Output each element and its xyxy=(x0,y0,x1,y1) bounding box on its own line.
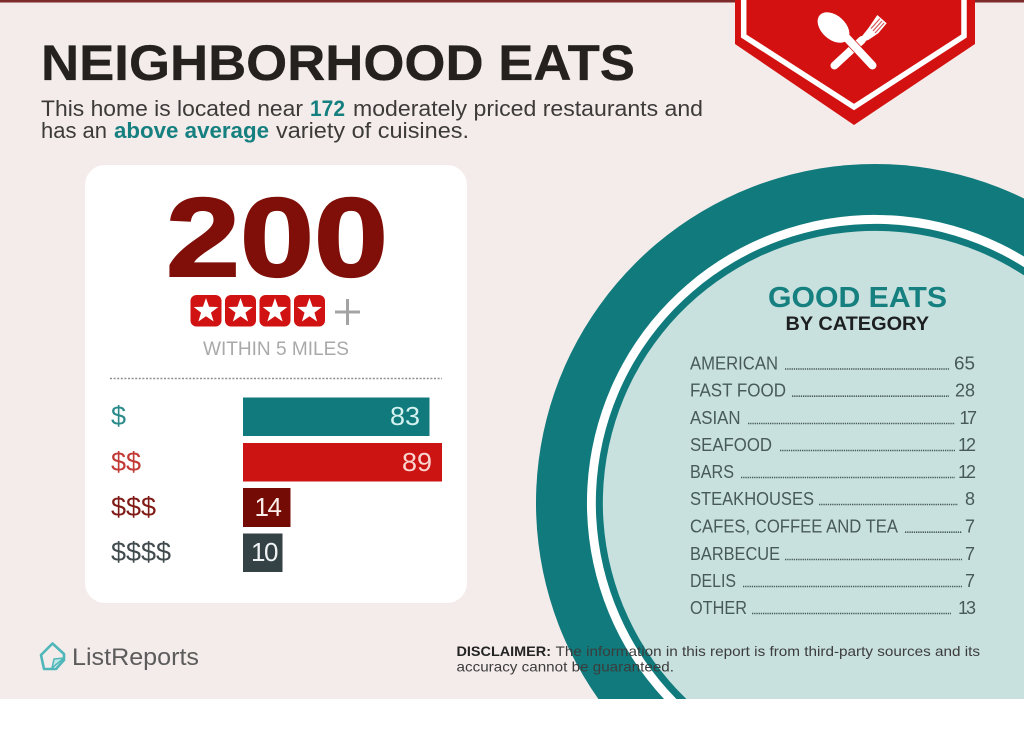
row: seafood: SEAFOOD xyxy=(690,435,772,455)
title: NEIGHBORHOOD EATS xyxy=(41,35,635,91)
subtitle text: 172 xyxy=(310,96,345,121)
subtitle text: moderately priced restaurants and xyxy=(353,96,703,121)
subtitle text: above average xyxy=(114,118,269,143)
row: seafood: 12 xyxy=(958,435,976,455)
bar: two dollars, 89 xyxy=(111,443,442,482)
row: delis: DELIS xyxy=(690,571,736,591)
icon: red shield badge xyxy=(735,0,975,125)
row: fast food xyxy=(690,381,975,401)
row: barbecue: 7 xyxy=(965,544,975,564)
row: barbecue xyxy=(690,544,975,564)
row: bars xyxy=(690,462,976,482)
icon: spoon and fork xyxy=(812,6,887,65)
logo: listreports: ListReports xyxy=(72,644,199,671)
row: american: 65 xyxy=(954,354,975,374)
row: bars: 12 xyxy=(958,462,976,482)
row: other: 13 xyxy=(958,598,976,618)
icon: house logo xyxy=(41,644,64,669)
disclaimer xyxy=(456,643,980,674)
bar: three dollars, 14: $$$ xyxy=(111,492,156,522)
bar: four dollars, 10: $$$$ xyxy=(111,537,171,567)
within 5 miles caption: WITHIN 5 MILES xyxy=(203,338,349,360)
icon: plus sign xyxy=(335,299,360,325)
row: asian: ASIAN xyxy=(690,408,740,428)
row: fast food: FAST FOOD xyxy=(690,381,786,401)
bar: two dollars, 89: $$ xyxy=(111,447,141,477)
bar: one dollar, 83: $ xyxy=(111,401,126,431)
category list xyxy=(690,354,977,618)
row: seafood xyxy=(690,435,976,455)
row: other xyxy=(690,598,976,618)
row: cafes, coffee and tea: CAFES, COFFEE AND TEA xyxy=(690,517,898,537)
subtitle text: variety of cuisines. xyxy=(276,118,469,143)
row: delis xyxy=(690,571,975,591)
big number 200: 200 xyxy=(166,175,388,300)
row: bars: BARS xyxy=(690,462,734,482)
bar: four dollars, 10 xyxy=(111,534,282,572)
bar: three dollars, 14 xyxy=(111,488,290,527)
disclaimer: accuracy cannot be guaranteed. xyxy=(456,658,674,674)
heading: good eats: GOOD EATS xyxy=(768,282,947,314)
row: other: OTHER xyxy=(690,598,747,618)
subtitle text: has an xyxy=(41,118,107,143)
row: steakhouses: STEAKHOUSES xyxy=(690,489,814,509)
row: american: AMERICAN xyxy=(690,354,778,374)
row: steakhouses xyxy=(690,489,975,509)
row: asian: 17 xyxy=(960,408,977,428)
row: american xyxy=(690,354,975,374)
heading: by category: BY CATEGORY xyxy=(786,313,929,335)
disclaimer: DISCLAIMER: xyxy=(456,643,551,659)
bar: one dollar, 83 xyxy=(111,398,430,436)
disclaimer: The information in this report is from third-party sources and its xyxy=(556,643,980,659)
subtitle text xyxy=(41,96,703,143)
row: cafes, coffee and tea: 7 xyxy=(965,517,975,537)
panel: restaurant ratings card xyxy=(85,165,467,603)
subtitle text: This home is located near xyxy=(41,96,303,121)
bar: three dollars, 14: 14 xyxy=(254,492,281,522)
icon: four star rating xyxy=(190,295,325,326)
row: barbecue: BARBECUE xyxy=(690,544,780,564)
bar: one dollar, 83: 83 xyxy=(390,401,420,431)
row: asian xyxy=(690,408,977,428)
panel: plate circle xyxy=(536,164,1024,699)
bar chart: restaurants by price xyxy=(111,398,442,572)
bar: four dollars, 10: 10 xyxy=(251,537,278,567)
row: delis: 7 xyxy=(965,571,975,591)
bar: two dollars, 89: 89 xyxy=(402,447,432,477)
row: steakhouses: 8 xyxy=(965,489,975,509)
row: fast food: 28 xyxy=(955,381,975,401)
